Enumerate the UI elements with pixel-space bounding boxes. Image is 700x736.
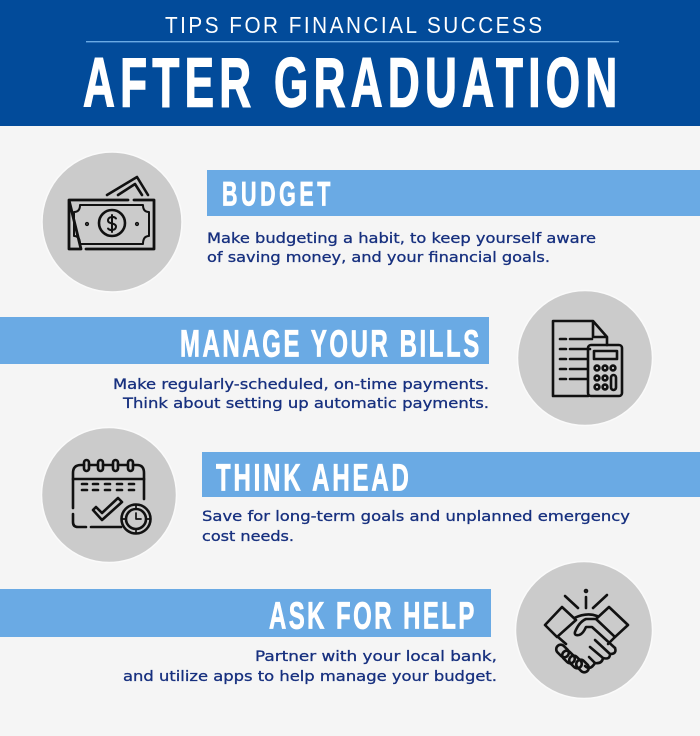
- text: think ahead: [202, 509, 630, 545]
- heading: ask for help: ASK FOR HELP: [269, 594, 474, 637]
- heading: think ahead: THINK AHEAD: [216, 456, 409, 499]
- title: AFTER GRADUATION: [83, 44, 617, 122]
- text: budget: [207, 231, 596, 266]
- text: manage your bills: Think about setting up automatic payments.: [122, 396, 489, 412]
- text: budget: of saving money, and your financial goals.: [207, 250, 550, 266]
- heading: budget: BUDGET: [222, 176, 331, 214]
- header banner: [0, 0, 700, 126]
- text: think ahead: cost needs.: [202, 529, 294, 545]
- text: think ahead: Save for long-term goals and unplanned emergency: [202, 509, 630, 525]
- subtitle: TIPS FOR FINANCIAL SUCCESS: [165, 12, 542, 38]
- text: ask for help: and utilize apps to help manage your budget.: [123, 669, 497, 685]
- icon: money: [42, 152, 182, 292]
- panel: think ahead: [42, 428, 700, 562]
- panel: budget: [42, 152, 700, 292]
- panel: manage your bills: [0, 290, 652, 426]
- heading: manage your bills: MANAGE YOUR BILLS: [180, 322, 479, 365]
- icon: calendar: [42, 428, 176, 562]
- icon: handshake: [516, 562, 652, 698]
- icon: document and calculator: [518, 290, 652, 426]
- text: budget: Make budgeting a habit, to keep yourself aware: [207, 231, 596, 247]
- text: manage your bills: Make regularly-scheduled, on-time payments.: [113, 377, 489, 393]
- panel: ask for help: [0, 562, 652, 698]
- text: manage your bills: [113, 377, 489, 412]
- text: ask for help: Partner with your local bank,: [255, 649, 497, 665]
- text: ask for help: [123, 649, 497, 685]
